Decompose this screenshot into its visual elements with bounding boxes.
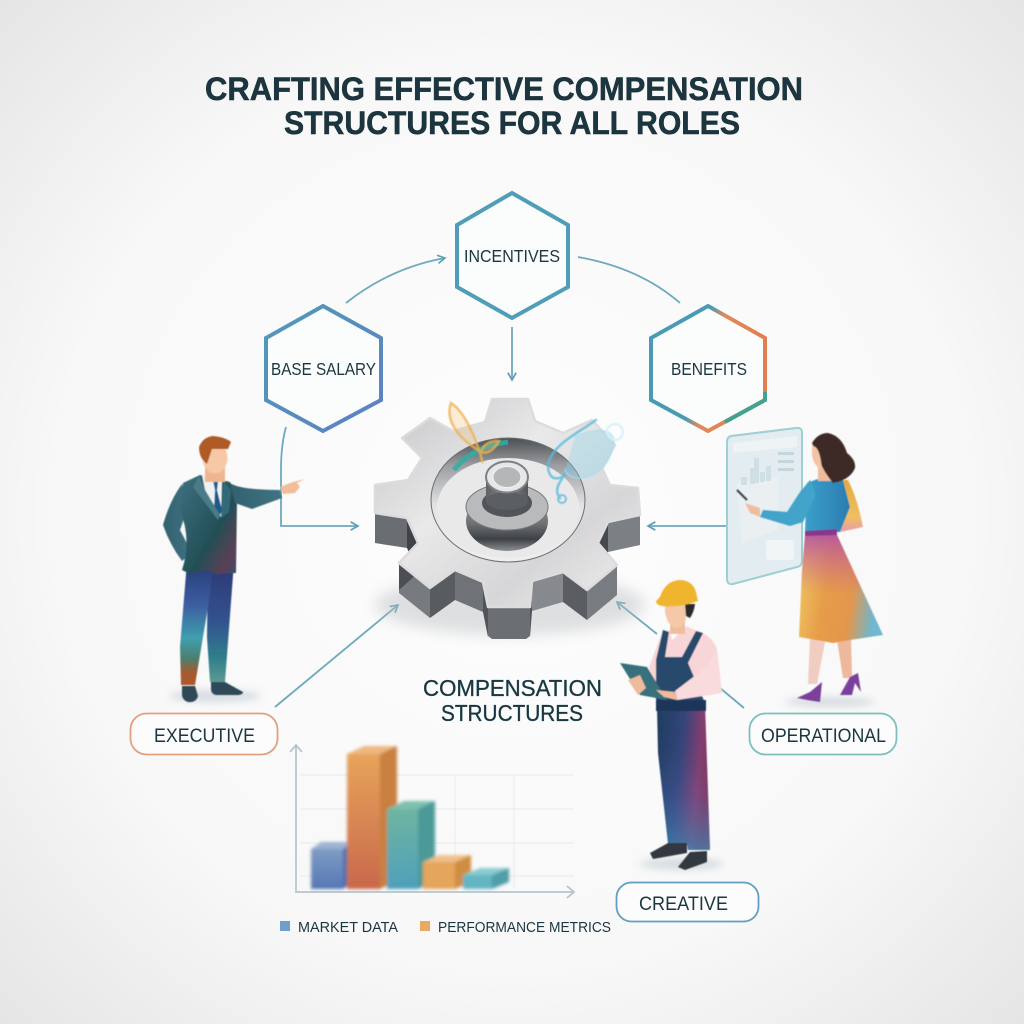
pill: executive: EXECUTIVE: [154, 726, 255, 747]
legend: performance metrics: PERFORMANCE METRICS: [438, 919, 611, 936]
title: [205, 71, 803, 141]
hexagon: base salary: [266, 306, 381, 431]
center label: COMPENSATION: [423, 675, 602, 701]
title: CRAFTING EFFECTIVE COMPENSATION: [205, 71, 803, 107]
pill: operational: OPERATIONAL: [761, 726, 886, 747]
center label: STRUCTURES: [441, 700, 583, 726]
pill: creative: [616, 882, 758, 922]
pill: operational: [750, 714, 896, 754]
center label: [423, 675, 602, 726]
title: STRUCTURES FOR ALL ROLES: [284, 105, 740, 141]
connector arrows: [275, 257, 744, 708]
bar chart: [290, 745, 574, 898]
central gear: [375, 399, 645, 639]
hexagon: incentives: INCENTIVES: [464, 246, 560, 266]
hexagon: benefits: BENEFITS: [671, 359, 747, 379]
pill: executive: [130, 714, 278, 754]
hexagon: incentives: [457, 193, 568, 318]
figure: operational woman with screen: [727, 428, 883, 707]
hexagon: base salary: BASE SALARY: [271, 359, 376, 379]
figure: executive: [163, 436, 305, 702]
holographic screen: [727, 428, 802, 584]
legend: market data: MARKET DATA: [298, 919, 398, 936]
pill: creative: CREATIVE: [639, 894, 728, 915]
hexagon: benefits: [651, 306, 765, 431]
figure: creative worker: [620, 580, 724, 870]
